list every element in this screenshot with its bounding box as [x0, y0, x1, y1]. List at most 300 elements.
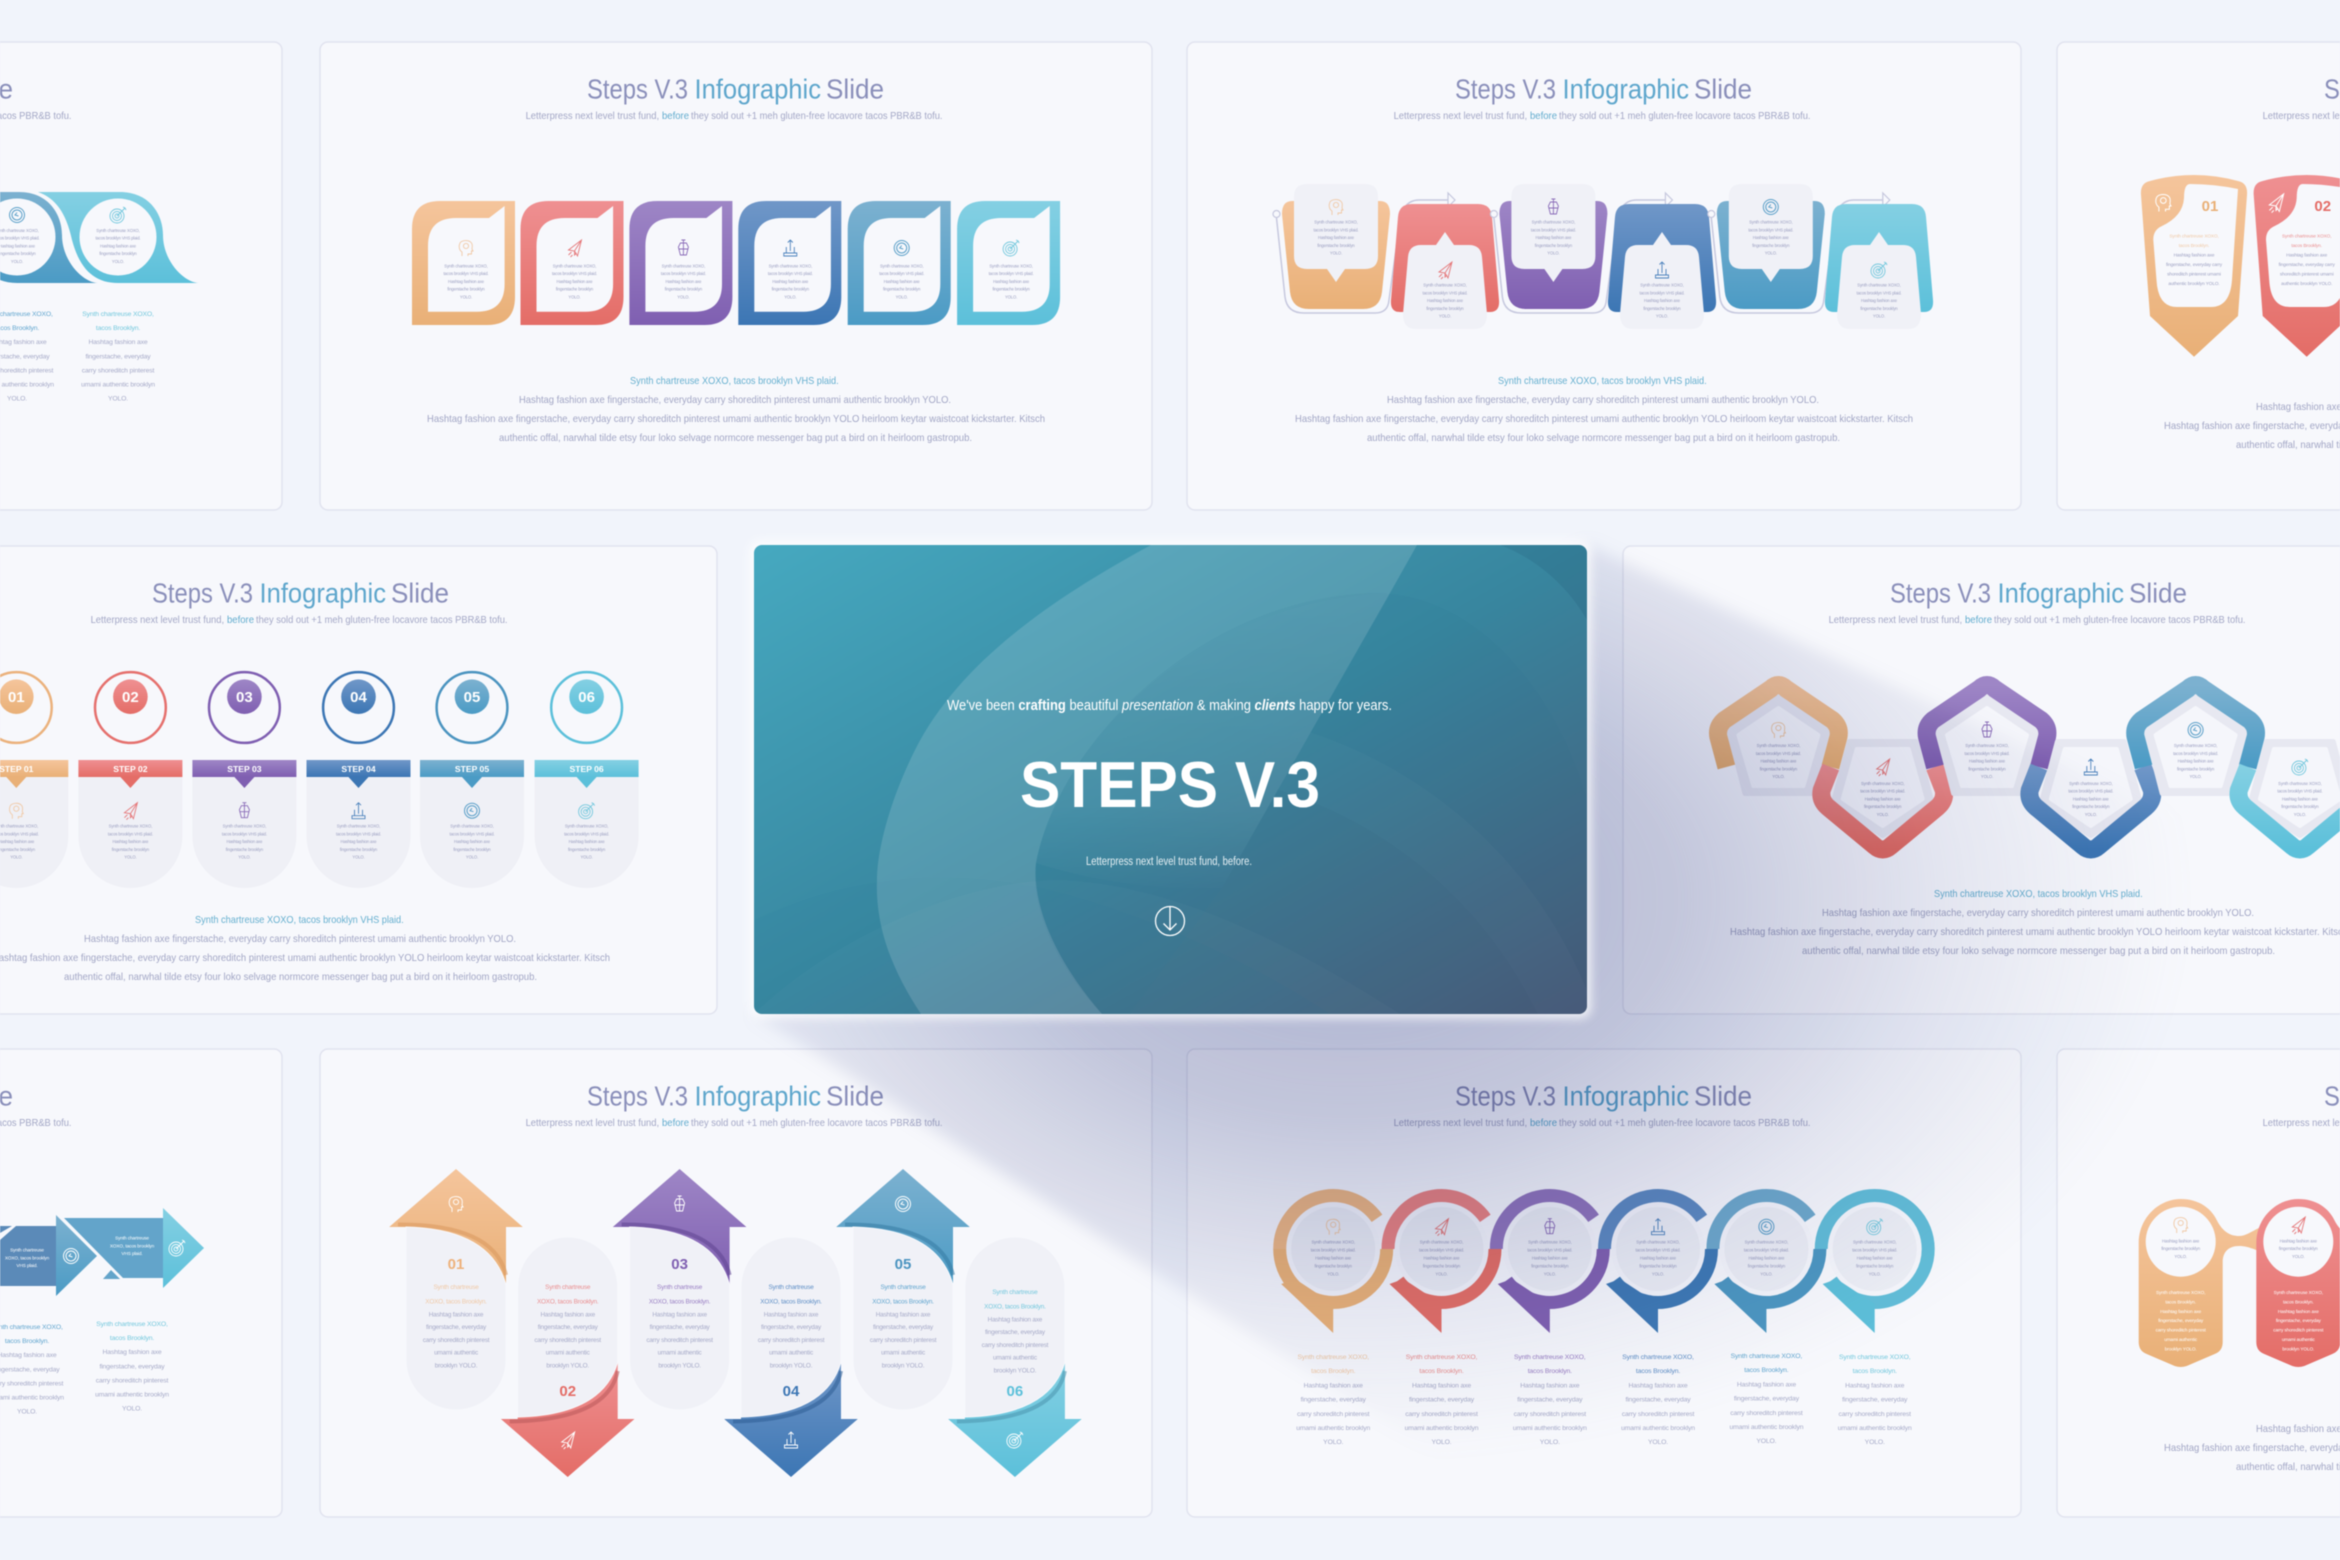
- step 04 column: 04: [350, 689, 367, 706]
- step 01 connected pill: Hashtag fashion axe: [2160, 1309, 2202, 1314]
- heading: before: [1965, 614, 1992, 626]
- step 05 pin ring: YOLO.: [1756, 1438, 1777, 1445]
- step 06 arrow: tacos Brooklyn.: [110, 1335, 154, 1342]
- step 03 up arrow: brooklyn YOLO.: [658, 1362, 701, 1369]
- step 06 pin ring: Synth chartreuse XOXO,: [1853, 1240, 1896, 1244]
- card background: [2057, 1049, 2340, 1517]
- step 06 teardrop: tacos Brooklyn.: [96, 325, 140, 332]
- step 03 pin ring: Synth chartreuse XOXO,: [1514, 1354, 1586, 1361]
- step 06 teardrop: tacos brooklyn VHS plaid.: [96, 236, 140, 241]
- step 02 column: YOLO.: [124, 855, 137, 860]
- step 02 pin ring: Synth chartreuse XOXO,: [1406, 1354, 1478, 1361]
- heading: Letterpress next level trust fund,: [526, 1117, 659, 1129]
- step 06 column: [535, 672, 639, 888]
- slide glow: [750, 541, 1591, 1018]
- step 02 shield: 02: [2314, 198, 2331, 215]
- heading: Infographic: [694, 1080, 821, 1112]
- step 02 pin ring: carry shoreditch pinterest: [1405, 1411, 1478, 1418]
- step 06 down arrow: umami authentic: [993, 1355, 1038, 1362]
- step 03 pin ring: Hashtag fashion axe: [1520, 1382, 1580, 1389]
- step 02 column: Synth chartreuse XOXO,: [109, 824, 152, 828]
- step 01 leaf: Hashtag fashion axe: [448, 279, 485, 284]
- step 01 leaf: tacos brooklyn VHS plaid.: [444, 271, 488, 276]
- step 05 tab: tacos brooklyn VHS plaid.: [1748, 227, 1793, 232]
- step 02 down arrow: Hashtag fashion axe: [540, 1312, 596, 1318]
- heading: they sold out +1 meh gluten-free locavore tacos PBR&B tofu.: [691, 1117, 942, 1129]
- step 02 leaf: fingerstache brooklyn: [556, 287, 594, 292]
- step 01 pin ring: fingerstache brooklyn: [1315, 1264, 1353, 1268]
- step 04 column: [306, 672, 410, 888]
- step 01 tab: [1273, 184, 1455, 313]
- step 02 leaf: YOLO.: [568, 294, 581, 299]
- step 02 pentagon: tacos brooklyn VHS plaid.: [1860, 789, 1905, 794]
- step 03 leaf: Hashtag fashion axe: [665, 279, 702, 284]
- heading: Steps V.3: [587, 1080, 688, 1112]
- description: authentic offal, narwhal tilde etsy four loko selvage normcore messenger bag put a bird on it heirloom gastropub.: [64, 971, 537, 983]
- step 01 leaf: YOLO.: [460, 294, 472, 299]
- heading: Slide: [826, 74, 884, 104]
- step 01 connected pill: tacos Brooklyn.: [2165, 1299, 2196, 1304]
- step 05 arrow: VHS plaid.: [16, 1263, 38, 1268]
- heading: they sold out +1 meh gluten-free locavore tacos PBR&B tofu.: [1559, 110, 1810, 122]
- step 02 pentagon: fingerstache brooklyn: [1864, 804, 1902, 809]
- step 06 arrow: Synth chartreuse XOXO,: [96, 1321, 168, 1328]
- step 06 pentagon: tacos brooklyn VHS plaid.: [2277, 789, 2322, 794]
- card background: [0, 546, 717, 1014]
- step 03 pin ring: Hashtag fashion axe: [1532, 1256, 1569, 1260]
- step 06 pentagon: [2238, 742, 2340, 850]
- heading: [2263, 74, 2340, 122]
- step 02 pin ring: tacos Brooklyn.: [1419, 1368, 1464, 1375]
- panel: circular teardrop steps (cropped left): [0, 42, 282, 510]
- step 01 leaf: fingerstache brooklyn: [447, 287, 485, 292]
- step 04 column: fingerstache brooklyn: [340, 847, 378, 852]
- step 05 up arrow: [836, 1169, 970, 1410]
- step 01 pin ring: tacos brooklyn VHS plaid.: [1311, 1248, 1356, 1252]
- step 05 tab: fingerstache brooklyn: [1752, 243, 1790, 248]
- step 04 pin ring: Synth chartreuse XOXO,: [1622, 1354, 1694, 1361]
- step 01 pin ring: carry shoreditch pinterest: [1297, 1411, 1370, 1418]
- step 05 arrow: tacos Brooklyn.: [5, 1338, 49, 1345]
- heading: [2263, 1080, 2340, 1129]
- step 06 pentagon: Synth chartreuse XOXO,: [2278, 781, 2322, 786]
- description: Hashtag fashion axe fingerstache, everyday carry shoreditch pinterest umami authentic brooklyn YOLO heirloom keytar waistcoat kickstarter. Kitsch: [427, 413, 1045, 425]
- step 01 shield: [2141, 175, 2247, 357]
- step 01 column: [0, 672, 68, 888]
- panel: connected pill steps (cropped right): [2057, 1049, 2340, 1517]
- step 04 tab: Synth chartreuse XOXO,: [1640, 282, 1684, 288]
- step 04 pin ring: fingerstache brooklyn: [1639, 1264, 1677, 1268]
- step 02 shield: authentic brooklyn YOLO.: [2281, 281, 2332, 286]
- step 02 connected pill: YOLO.: [2292, 1254, 2305, 1259]
- description: Synth chartreuse XOXO, tacos brooklyn VHS plaid.: [1934, 888, 2143, 900]
- step 06 teardrop: Hashtag fashion axe: [100, 243, 137, 248]
- heading: [0, 74, 72, 122]
- step 03 column: Synth chartreuse XOXO,: [223, 824, 266, 828]
- step 04 down arrow: carry shoreditch pinterest: [758, 1337, 825, 1344]
- description: [0, 914, 610, 983]
- step 04 pin ring: Hashtag fashion axe: [1628, 1382, 1688, 1389]
- description: authentic offal, narwhal tilde etsy four loko selvage normcore messenger bag put a bird on it heirloom gastropub.: [1367, 432, 1840, 444]
- step 06 leaf: Hashtag fashion axe: [993, 279, 1030, 284]
- step 06 pentagon: fingerstache brooklyn: [2281, 804, 2319, 809]
- step 01 connected pill: umami authentic: [2164, 1337, 2198, 1342]
- heading: Infographic: [1562, 1080, 1689, 1112]
- panel: shield steps (cropped right): [2057, 42, 2340, 510]
- step 06 pin ring: YOLO.: [1865, 1439, 1885, 1446]
- step 01 connected pill: fingerstache, everyday: [2158, 1318, 2204, 1323]
- step 03 column: 03: [236, 689, 253, 706]
- step 04 down arrow: brooklyn YOLO.: [770, 1362, 813, 1369]
- step 02 connected pill: umami authentic: [2282, 1337, 2315, 1342]
- heading: before: [227, 614, 254, 626]
- step 05 column: Synth chartreuse XOXO,: [450, 824, 494, 828]
- step 03 pentagon: fingerstache brooklyn: [1968, 766, 2006, 771]
- step 05 pin ring: YOLO.: [1760, 1272, 1773, 1276]
- step 03 column: tacos brooklyn VHS plaid.: [222, 831, 267, 836]
- step 05 up arrow: Synth chartreuse: [880, 1284, 926, 1291]
- step 01 pentagon: YOLO.: [1772, 774, 1785, 779]
- card background: [2057, 42, 2340, 510]
- step 02 tab: Synth chartreuse XOXO,: [1423, 282, 1467, 288]
- step 02 pentagon: YOLO.: [1877, 812, 1889, 817]
- step 05 pin ring: Hashtag fashion axe: [1737, 1381, 1796, 1388]
- step 03 up arrow: [613, 1169, 746, 1410]
- step 01 connected pill: fingerstache brooklyn: [2161, 1246, 2201, 1251]
- step 01 pin ring: tacos Brooklyn.: [1311, 1368, 1356, 1375]
- step 04 leaf: Hashtag fashion axe: [772, 279, 809, 284]
- step 01 up arrow: Synth chartreuse: [433, 1284, 479, 1291]
- step 06 column: fingerstache brooklyn: [568, 847, 606, 852]
- heading: Letterpress next level trust fund,: [1829, 614, 1962, 626]
- step 05 pin ring: fingerstache brooklyn: [1748, 1264, 1786, 1268]
- step 01 leaf: [412, 201, 515, 325]
- step 06 pin ring: YOLO.: [1869, 1272, 1881, 1276]
- step 02 pin ring: umami authentic brooklyn: [1405, 1425, 1479, 1432]
- step 04 pentagon: YOLO.: [2085, 812, 2097, 817]
- step 06 pin ring: Synth chartreuse XOXO,: [1839, 1354, 1911, 1361]
- step 04 pin ring: YOLO.: [1648, 1439, 1668, 1446]
- step 02 pentagon: [1821, 742, 1944, 850]
- step 02 connected pill: fingerstache brooklyn: [2279, 1246, 2318, 1251]
- step 05 teardrop: YOLO.: [7, 396, 27, 403]
- heading: Infographic: [1562, 74, 1689, 104]
- step 03 pin ring: tacos brooklyn VHS plaid.: [1527, 1248, 1572, 1252]
- step 01 connected pill: brooklyn YOLO.: [2165, 1346, 2197, 1351]
- step 01 pentagon: Synth chartreuse XOXO,: [1757, 743, 1800, 748]
- panel: alternating tab steps: [1187, 42, 2021, 510]
- step 05 pin ring: tacos brooklyn VHS plaid.: [1744, 1248, 1789, 1252]
- step 06 leaf: Synth chartreuse XOXO,: [989, 264, 1033, 268]
- caption: Letterpress next level trust fund, before.: [1086, 856, 1252, 868]
- step 02 shield: Hashtag fashion axe: [2286, 252, 2328, 258]
- heading: Letterpress next level trust fund,: [91, 614, 224, 626]
- heading: Infographic: [1998, 578, 2124, 608]
- step 01 pin ring: Hashtag fashion axe: [1304, 1382, 1363, 1389]
- step 02 pin ring: tacos brooklyn VHS plaid.: [1419, 1248, 1464, 1252]
- step 03 pin ring: umami authentic brooklyn: [1513, 1425, 1587, 1432]
- step 06 column: Synth chartreuse XOXO,: [565, 824, 608, 828]
- step 05 leaf: [848, 201, 951, 325]
- step 01 pin ring: umami authentic brooklyn: [1296, 1425, 1370, 1432]
- step 04 down arrow: fingerstache, everyday: [761, 1324, 822, 1331]
- step 06 leaf: YOLO.: [1005, 294, 1017, 299]
- description: Hashtag fashion axe fingerstache, everyday carry shoreditch pinterest umami authentic brooklyn YOLO heirloom keytar waistcoat kickstarter. Kitsch: [1295, 413, 1913, 425]
- step 05 column: STEP 05: [455, 764, 489, 774]
- card background: [320, 1049, 1152, 1517]
- step 05 column: [420, 672, 524, 888]
- step 01 shield: Hashtag fashion axe: [2174, 252, 2215, 258]
- panel: numbered circle steps: [0, 546, 717, 1014]
- step 05 arrow: Synth chartreuse: [10, 1248, 44, 1252]
- step 02 connected pill: Hashtag fashion axe: [2278, 1309, 2319, 1314]
- step 03 up arrow: 03: [671, 1256, 688, 1273]
- step 04 pin ring: fingerstache, everyday: [1625, 1397, 1691, 1404]
- step 06 teardrop: YOLO.: [112, 259, 124, 264]
- step 06 column: YOLO.: [580, 855, 593, 860]
- heading: [1829, 578, 2246, 626]
- step 02 connected pill: Hashtag fashion axe: [2280, 1238, 2318, 1244]
- step 06 arrow: umami authentic brooklyn: [95, 1392, 169, 1398]
- step 06 teardrop: Synth chartreuse XOXO,: [82, 311, 154, 318]
- step 02 column: tacos brooklyn VHS plaid.: [108, 831, 153, 836]
- step 03 leaf: Synth chartreuse XOXO,: [662, 264, 705, 268]
- step 04 pin ring: tacos Brooklyn.: [1636, 1368, 1680, 1375]
- description: Hashtag fashion axe fingerstache, everyday carry shoreditch pinterest umami authentic brooklyn YOLO.: [519, 394, 951, 406]
- step 04 column: Synth chartreuse XOXO,: [337, 824, 380, 828]
- step 01 pentagon: fingerstache brooklyn: [1760, 766, 1798, 771]
- heading: before: [1530, 1117, 1557, 1129]
- step 06 teardrop: fingerstache brooklyn: [99, 251, 137, 256]
- step 05 pin ring: tacos Brooklyn.: [1744, 1367, 1789, 1374]
- step 03 column: fingerstache brooklyn: [226, 847, 264, 852]
- description: authentic offal, narwhal tilde etsy four loko selvage normcore messenger bag put a bird on it heirloom gastropub.: [499, 432, 972, 444]
- step 06 arrow: Hashtag fashion axe: [102, 1349, 162, 1356]
- step 01 pin ring: Synth chartreuse XOXO,: [1311, 1240, 1355, 1244]
- step 05 leaf: Hashtag fashion axe: [884, 279, 920, 284]
- step 04 tab: YOLO.: [1656, 314, 1668, 319]
- step 02 pin ring: YOLO.: [1435, 1272, 1448, 1276]
- step 02 column: fingerstache brooklyn: [112, 847, 150, 852]
- step 06 pin ring: tacos brooklyn VHS plaid.: [1852, 1248, 1897, 1252]
- step 05 arrow: [0, 1215, 97, 1416]
- description: [427, 375, 1045, 444]
- step 06 pentagon: YOLO.: [2294, 812, 2306, 817]
- step 02 pentagon: Synth chartreuse XOXO,: [1861, 781, 1904, 786]
- step 06 leaf: tacos brooklyn VHS plaid.: [989, 271, 1034, 276]
- step 01 up arrow: 01: [448, 1256, 464, 1273]
- step 04 down arrow: [724, 1237, 858, 1477]
- step 03 column: YOLO.: [238, 855, 251, 860]
- step 03 pin ring: Synth chartreuse XOXO,: [1528, 1240, 1572, 1244]
- heading: Steps V.3: [1455, 1080, 1556, 1112]
- step 06 pin ring: carry shoreditch pinterest: [1838, 1411, 1911, 1418]
- heading: they sold out +1 meh gluten-free locavore tacos PBR&B tofu.: [691, 110, 942, 122]
- description: [2164, 1423, 2340, 1473]
- step 04 pentagon: [2029, 742, 2152, 850]
- heading: before: [1530, 110, 1557, 122]
- step 06 pentagon: Hashtag fashion axe: [2282, 796, 2319, 801]
- step 05 up arrow: umami authentic: [881, 1350, 926, 1357]
- step 02 connected pill: brooklyn YOLO.: [2282, 1346, 2314, 1351]
- description: [2164, 401, 2340, 451]
- step 05 column: Hashtag fashion axe: [454, 839, 491, 844]
- step 03 leaf: tacos brooklyn VHS plaid.: [661, 271, 706, 276]
- long cast shadow from centre slide: [754, 545, 2340, 1560]
- slide background: [754, 545, 1587, 1014]
- step 04 pin ring: tacos brooklyn VHS plaid.: [1636, 1248, 1680, 1252]
- description: [1295, 375, 1913, 444]
- step 04 pin ring: [1604, 1196, 1712, 1446]
- step 01 tab: fingerstache brooklyn: [1317, 243, 1355, 248]
- step 05 leaf: YOLO.: [896, 294, 908, 299]
- step 01 shield: fingerstache, everyday carry: [2166, 262, 2223, 267]
- step 02 column: Hashtag fashion axe: [112, 839, 149, 844]
- description: Synth chartreuse XOXO, tacos brooklyn VHS plaid.: [630, 375, 839, 387]
- step 02 down arrow: [501, 1237, 634, 1477]
- step 06 arrow: YOLO.: [122, 1406, 142, 1413]
- step 04 pin ring: YOLO.: [1652, 1272, 1664, 1276]
- step 04 pentagon: Synth chartreuse XOXO,: [2069, 781, 2113, 786]
- heading: Slide: [2129, 578, 2187, 608]
- heading: [526, 1080, 942, 1129]
- step 02 shield: Synth chartreuse XOXO,: [2282, 234, 2331, 238]
- step 02 tab: tacos brooklyn VHS plaid.: [1423, 290, 1467, 295]
- step 06 teardrop: umami authentic brooklyn: [81, 382, 155, 388]
- step 03 pin ring: fingerstache brooklyn: [1531, 1264, 1569, 1268]
- step 05 pentagon: YOLO.: [2189, 774, 2202, 779]
- step 01 pin ring: [1280, 1196, 1387, 1446]
- step 01 up arrow: fingerstache, everyday: [426, 1324, 487, 1331]
- step 04 pentagon: tacos brooklyn VHS plaid.: [2068, 789, 2113, 794]
- heading: [91, 578, 508, 626]
- step 05 tab: Hashtag fashion axe: [1753, 235, 1790, 240]
- heading: [1394, 74, 1810, 122]
- heading: before: [662, 1117, 689, 1129]
- step 03 tab: Hashtag fashion axe: [1535, 235, 1572, 240]
- step 06 pin ring: [1821, 1196, 1928, 1446]
- step 05 pin ring: Synth chartreuse XOXO,: [1731, 1353, 1802, 1360]
- step 05 tab: Synth chartreuse XOXO,: [1749, 220, 1793, 224]
- step 05 arrow: YOLO.: [17, 1409, 37, 1416]
- step 03 column: STEP 03: [227, 764, 262, 774]
- step 06 teardrop: YOLO.: [108, 396, 128, 403]
- step 05 up arrow: carry shoreditch pinterest: [870, 1337, 937, 1344]
- card background: [320, 42, 1152, 510]
- step 02 shield: tacos Brooklyn.: [2291, 243, 2322, 248]
- heading: before: [662, 110, 689, 122]
- step 02 down arrow: umami authentic: [546, 1350, 591, 1357]
- step 06 teardrop: Synth chartreuse XOXO,: [96, 228, 140, 233]
- heading: Steps V.3: [1455, 74, 1556, 104]
- step 02 down arrow: brooklyn YOLO.: [546, 1362, 589, 1369]
- step 02 shield: [2254, 175, 2340, 357]
- step 01 shield: shoreditch pinterest umami: [2167, 272, 2221, 276]
- panel: pin ring steps: [1187, 1049, 2021, 1517]
- step 06 down arrow: Hashtag fashion axe: [988, 1316, 1043, 1324]
- heading: Steps V.3: [587, 74, 688, 104]
- step 03 tab: Synth chartreuse XOXO,: [1532, 220, 1575, 224]
- step 04 pentagon: fingerstache brooklyn: [2072, 804, 2110, 809]
- step 04 column: STEP 04: [341, 764, 376, 774]
- step 05 up arrow: XOXO, tacos Brooklyn.: [872, 1298, 934, 1306]
- step 02 pin ring: fingerstache, everyday: [1409, 1397, 1475, 1404]
- step 05 leaf: fingerstache brooklyn: [883, 287, 921, 292]
- step 04 down arrow: XOXO, tacos Brooklyn.: [760, 1298, 822, 1306]
- step 03 pin ring: fingerstache, everyday: [1517, 1397, 1583, 1404]
- step 02 down arrow: fingerstache, everyday: [538, 1324, 599, 1331]
- step 06 down arrow: 06: [1007, 1383, 1023, 1400]
- step 03 tab: [1490, 184, 1672, 313]
- step 06 pin ring: tacos Brooklyn.: [1853, 1368, 1897, 1375]
- step 05 leaf: Synth chartreuse XOXO,: [880, 264, 923, 268]
- step 01 pin ring: Synth chartreuse XOXO,: [1297, 1354, 1369, 1361]
- step 06 arrow: Synth chartreuse: [115, 1236, 149, 1240]
- icon: scroll down arrow: [1156, 906, 1184, 936]
- step 03 up arrow: umami authentic: [658, 1350, 703, 1357]
- step 01 column: STEP 01: [0, 764, 34, 774]
- step 01 up arrow: umami authentic: [434, 1350, 479, 1357]
- step 02 tab: Hashtag fashion axe: [1427, 298, 1464, 303]
- step 04 leaf: [738, 201, 841, 325]
- step 01 tab: tacos brooklyn VHS plaid.: [1314, 227, 1358, 232]
- step 01 pentagon: Hashtag fashion axe: [1760, 759, 1797, 764]
- step 03 tab: tacos brooklyn VHS plaid.: [1531, 227, 1576, 232]
- step 02 connected pill: tacos Brooklyn.: [2283, 1299, 2314, 1304]
- step 01 shield: authentic brooklyn YOLO.: [2168, 281, 2220, 286]
- step 06 pin ring: fingerstache, everyday: [1842, 1397, 1908, 1404]
- card background: [1187, 42, 2021, 510]
- step 04 down arrow: Hashtag fashion axe: [764, 1312, 819, 1318]
- heading: Slide: [391, 578, 449, 608]
- step 03 pin ring: YOLO.: [1544, 1272, 1556, 1276]
- step 02 leaf: [520, 201, 624, 325]
- step 01 leaf: Synth chartreuse XOXO,: [444, 264, 488, 268]
- step 06 teardrop: fingerstache, everyday: [85, 353, 151, 360]
- heading: [526, 74, 942, 122]
- step 01 shield: 01: [2202, 198, 2218, 215]
- step 01 up arrow: carry shoreditch pinterest: [423, 1337, 490, 1344]
- step 01 up arrow: [389, 1169, 523, 1410]
- step 05 pentagon: Synth chartreuse XOXO,: [2174, 743, 2217, 748]
- heading: Slide: [826, 1080, 884, 1112]
- step 01 pin ring: YOLO.: [1327, 1272, 1339, 1276]
- step 01 pentagon: tacos brooklyn VHS plaid.: [1756, 751, 1801, 756]
- step 04 leaf: YOLO.: [784, 294, 796, 299]
- heading: Letterpress next level trust fund,: [1394, 1117, 1527, 1129]
- step 06 pin ring: umami authentic brooklyn: [1838, 1425, 1912, 1432]
- step 03 up arrow: fingerstache, everyday: [650, 1324, 711, 1331]
- description: Synth chartreuse XOXO, tacos brooklyn VHS plaid.: [195, 914, 404, 926]
- step 06 pin ring: Hashtag fashion axe: [1845, 1382, 1905, 1389]
- step 01 shield: tacos Brooklyn.: [2179, 243, 2209, 248]
- step 02 down arrow: 02: [559, 1383, 576, 1400]
- heading: Steps V.3: [1890, 578, 1991, 608]
- description: [1730, 888, 2340, 957]
- step 06 pin ring: fingerstache brooklyn: [1856, 1264, 1894, 1268]
- card background: [0, 42, 282, 510]
- heading: Infographic: [694, 74, 821, 104]
- step 05 pin ring: Hashtag fashion axe: [1748, 1256, 1785, 1260]
- step 06 tab: fingerstache brooklyn: [1860, 306, 1898, 311]
- step 04 leaf: Synth chartreuse XOXO,: [769, 264, 812, 268]
- step 03 pentagon: YOLO.: [1981, 774, 1993, 779]
- card background: [1623, 546, 2340, 1014]
- step 04 column: YOLO.: [352, 855, 365, 860]
- panel: leaf square steps: [320, 42, 1152, 510]
- step 02 tab: fingerstache brooklyn: [1426, 306, 1464, 311]
- step 02 tab: YOLO.: [1439, 314, 1451, 319]
